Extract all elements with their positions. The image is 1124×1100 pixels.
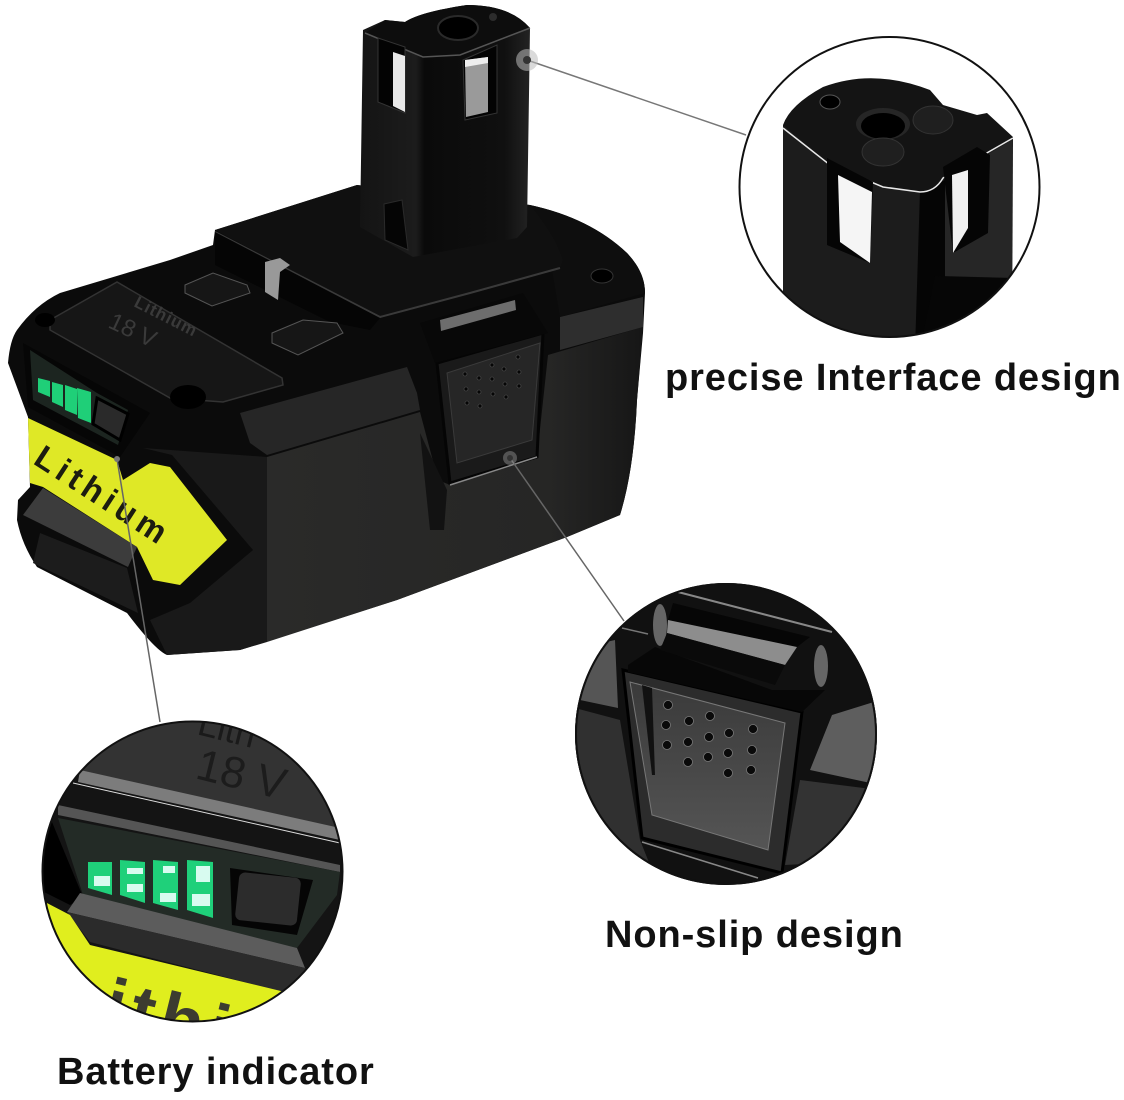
raised plate xyxy=(215,185,563,317)
yellow label xyxy=(28,418,227,585)
tower top xyxy=(365,5,530,57)
left notch xyxy=(35,313,55,327)
plate top xyxy=(83,722,334,827)
lights xyxy=(88,860,213,918)
heading: interface: precise Interface design xyxy=(665,357,1122,399)
yellow label text: Lithium xyxy=(28,438,174,551)
callout: battery indicator zoom: Lith xyxy=(194,702,260,756)
latch shadow xyxy=(420,433,447,530)
body xyxy=(783,125,1013,350)
tower rear slot xyxy=(384,200,408,250)
right contact xyxy=(943,147,990,253)
plate voltage: 18 V xyxy=(104,308,161,353)
button xyxy=(230,868,313,935)
plate text: Lithium xyxy=(131,293,201,341)
clip left xyxy=(185,273,250,306)
plate front wall xyxy=(215,232,380,330)
latch body xyxy=(623,670,802,873)
tower screw xyxy=(489,13,497,21)
lower vent xyxy=(33,533,138,613)
raised plate front highlight xyxy=(215,232,560,317)
indicator inner panel xyxy=(30,350,128,445)
callout: battery indicator zoom xyxy=(42,720,344,1022)
callout: battery indicator zoom: 18 V xyxy=(192,740,292,810)
lower left face xyxy=(143,448,267,655)
lower vent bevel xyxy=(23,488,137,567)
left contact xyxy=(827,158,873,263)
latch top xyxy=(628,647,825,712)
left contact slot xyxy=(378,38,405,113)
latch handle xyxy=(420,293,548,363)
right rim band xyxy=(560,297,643,350)
yellow label xyxy=(46,902,282,1020)
handle xyxy=(668,603,810,647)
leader line: interface xyxy=(516,49,746,135)
dots xyxy=(662,700,758,778)
latch bar xyxy=(440,300,516,331)
tower top edge xyxy=(365,28,530,57)
right contact highlight xyxy=(465,57,488,67)
tower xyxy=(360,5,530,257)
plate notch xyxy=(170,385,206,409)
indicator panel xyxy=(23,343,150,457)
heading: non-slip: Non-slip design xyxy=(605,914,904,956)
battery body xyxy=(8,185,645,655)
latch bottom highlight xyxy=(450,457,537,485)
front and right face xyxy=(267,327,643,642)
non-slip latch xyxy=(437,333,543,483)
lithium label plate xyxy=(50,282,283,402)
tower top hole xyxy=(438,16,478,40)
leader line: latch xyxy=(503,451,624,621)
right contact metal xyxy=(465,57,488,117)
left wedge xyxy=(44,822,82,905)
clip right xyxy=(272,320,343,355)
lower bands xyxy=(67,893,305,968)
ridge bands xyxy=(78,770,340,840)
screw hole xyxy=(591,269,613,283)
callout: interface zoom xyxy=(738,36,1040,350)
front rim band xyxy=(240,367,420,455)
button xyxy=(630,682,785,850)
left contact metal xyxy=(393,52,405,112)
leader line: indicator xyxy=(114,456,160,722)
indicator panel xyxy=(58,818,340,948)
indicator button xyxy=(93,398,128,440)
battery photo xyxy=(8,5,645,655)
cap xyxy=(783,78,1013,192)
indicator lights xyxy=(38,378,91,423)
callout: battery indicator zoom: ithi xyxy=(96,964,244,1073)
latch dots xyxy=(463,355,521,408)
deck surface xyxy=(530,205,645,317)
latch button xyxy=(447,343,540,463)
right contact slot xyxy=(463,45,497,120)
metal latch pin xyxy=(265,258,290,300)
heading: battery indicator: Battery indicator xyxy=(57,1051,375,1093)
callout: non-slip zoom xyxy=(575,583,880,890)
